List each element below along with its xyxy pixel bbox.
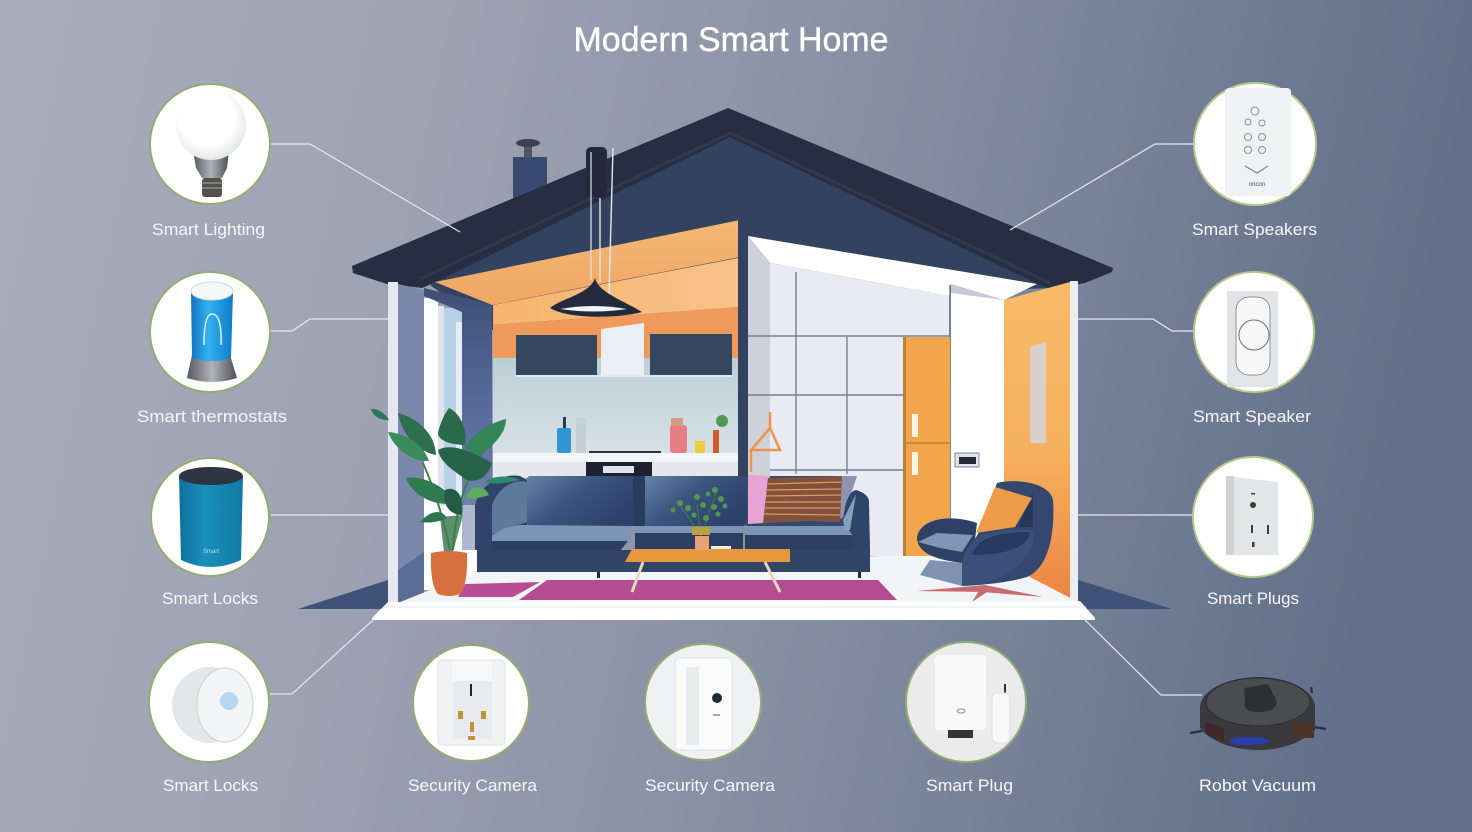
camera housing <box>675 658 732 750</box>
vacuum display <box>1229 737 1269 745</box>
bulb glass <box>176 90 246 160</box>
label: smart locks 1: Smart Locks <box>162 589 258 608</box>
table plant <box>670 487 728 536</box>
plug face <box>453 681 492 739</box>
cabinets <box>516 323 732 377</box>
right room <box>738 220 1078 601</box>
ground shadows <box>298 580 1172 609</box>
device: security camera <box>645 644 761 760</box>
coffee table <box>625 536 790 592</box>
hub foot <box>948 729 973 738</box>
bulb base <box>193 150 229 178</box>
plug pins <box>458 684 486 740</box>
kitchen ceiling band <box>493 258 738 325</box>
lock housing <box>172 667 248 743</box>
device: smart plug hub <box>906 642 1026 762</box>
speaker body <box>179 476 243 567</box>
title: Modern Smart Home <box>574 21 888 59</box>
hub body <box>935 655 986 730</box>
speaker top <box>179 467 243 485</box>
kitchen ceiling <box>435 220 740 305</box>
small rug <box>458 582 540 597</box>
floor slab <box>372 601 1095 620</box>
device: speaker <box>151 458 269 576</box>
main rug <box>519 580 897 600</box>
device: bottom plug <box>413 645 529 761</box>
lock sensor <box>220 692 238 710</box>
chimney <box>513 139 547 204</box>
label: smart plug: Smart Plug <box>926 776 1013 795</box>
side brushes <box>1190 687 1326 733</box>
label: security camera 1: Security Camera <box>408 776 538 795</box>
label: smart thermostats: Smart thermostats <box>137 407 287 426</box>
wall plate <box>1226 476 1278 555</box>
socket holes <box>1250 493 1269 547</box>
plug plate <box>438 660 505 745</box>
floor <box>398 556 1076 603</box>
plug body <box>992 693 1010 743</box>
label: smart speaker: Smart Speaker <box>1193 407 1311 426</box>
roof <box>352 108 1113 289</box>
device: smart speaker remote <box>1194 272 1314 392</box>
vacuum turret <box>1244 684 1277 712</box>
device: smart plugs <box>1193 457 1313 577</box>
pendant lamp <box>550 147 642 317</box>
thermostat body <box>191 292 233 361</box>
kitchen back wall <box>493 358 739 468</box>
panel body <box>1225 88 1291 196</box>
gable <box>430 130 1050 330</box>
label: smart lighting: Smart Lighting <box>152 220 265 239</box>
label: robot vacuum: Robot Vacuum <box>1199 776 1316 795</box>
panel wordmark: nricon <box>1249 182 1265 188</box>
potted plant <box>371 408 520 596</box>
speaker wordmark: Smart <box>203 549 219 555</box>
wall thermostat <box>955 453 979 467</box>
device: smart lighting <box>150 84 270 204</box>
sofa <box>475 475 870 578</box>
wall sconce <box>1030 342 1046 443</box>
remote dial <box>1239 320 1269 350</box>
connector lines <box>270 144 1202 695</box>
device: smart speakers panel <box>1194 83 1316 205</box>
thermostat symbol <box>204 314 221 345</box>
device: smart thermostat <box>150 272 270 392</box>
vacuum top <box>1206 678 1310 726</box>
counter <box>493 451 739 478</box>
plug pin <box>1004 684 1006 694</box>
label: smart plugs: Smart Plugs <box>1207 589 1299 608</box>
panel chevron <box>1245 166 1268 173</box>
plug top <box>452 661 492 681</box>
hub logo <box>957 709 965 713</box>
orange door <box>903 337 950 556</box>
camera side <box>686 667 699 745</box>
thermostat base <box>187 355 237 382</box>
left wall strips <box>388 282 492 602</box>
coat hanger <box>751 412 780 472</box>
wall grid lines <box>748 272 950 556</box>
counter items <box>557 415 728 453</box>
armchair <box>917 481 1053 602</box>
camera mark <box>713 714 720 716</box>
label: smart locks 2: Smart Locks <box>163 776 258 795</box>
vacuum side panels <box>1292 722 1314 738</box>
remote backing <box>1227 291 1278 387</box>
label: security camera 2: Security Camera <box>645 776 776 795</box>
thermostat top <box>191 282 233 300</box>
vacuum body <box>1200 677 1315 750</box>
kitchen orange wall <box>493 307 738 358</box>
label: smart speakers: Smart Speakers <box>1192 220 1317 239</box>
bulb screw <box>202 178 222 197</box>
camera lens <box>712 693 722 703</box>
device: smart lock <box>149 642 269 762</box>
device: robot vacuum <box>1190 677 1326 750</box>
remote body <box>1236 297 1270 375</box>
house illustration <box>298 108 1172 620</box>
lock face <box>197 668 253 742</box>
panel buttons <box>1244 107 1266 154</box>
